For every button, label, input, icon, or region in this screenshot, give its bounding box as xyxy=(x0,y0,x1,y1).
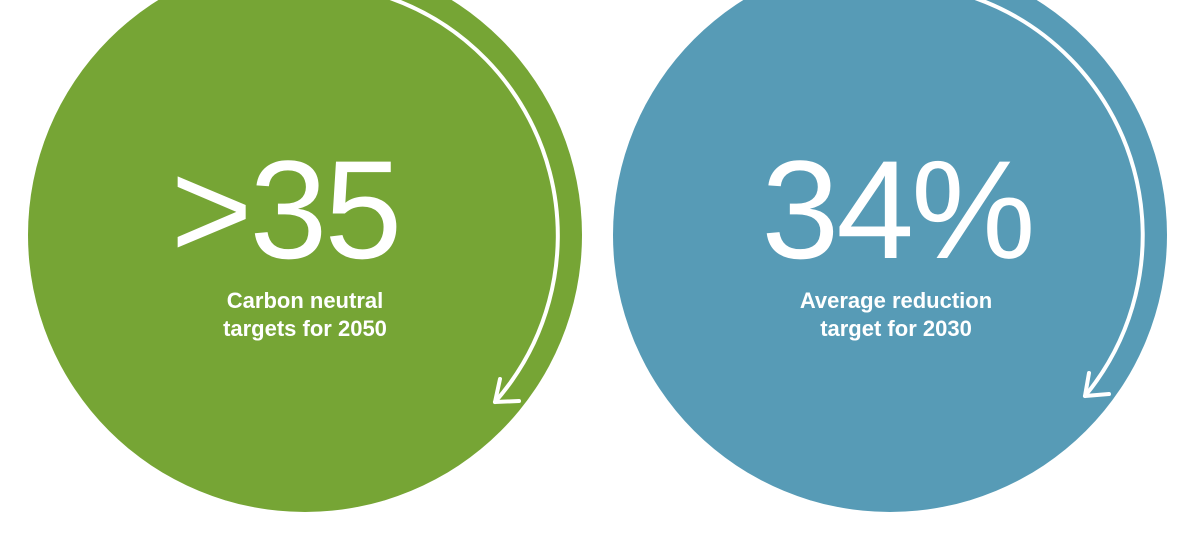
caption: carbon neutral: targets for 2050 xyxy=(223,316,387,341)
panel: green circle xyxy=(28,0,582,512)
big number: >35: >35 xyxy=(171,131,399,288)
big number: 34%: 34% xyxy=(761,131,1033,288)
arrow: green circle arc xyxy=(390,0,558,402)
arrow: blue circle arc xyxy=(975,0,1143,396)
caption: average reduction xyxy=(800,288,992,341)
panel: blue circle xyxy=(613,0,1167,512)
caption: average reduction: target for 2030 xyxy=(820,316,972,341)
caption: average reduction: Average reduction xyxy=(800,288,992,313)
caption: carbon neutral: Carbon neutral xyxy=(227,288,383,313)
caption: carbon neutral xyxy=(223,288,387,341)
